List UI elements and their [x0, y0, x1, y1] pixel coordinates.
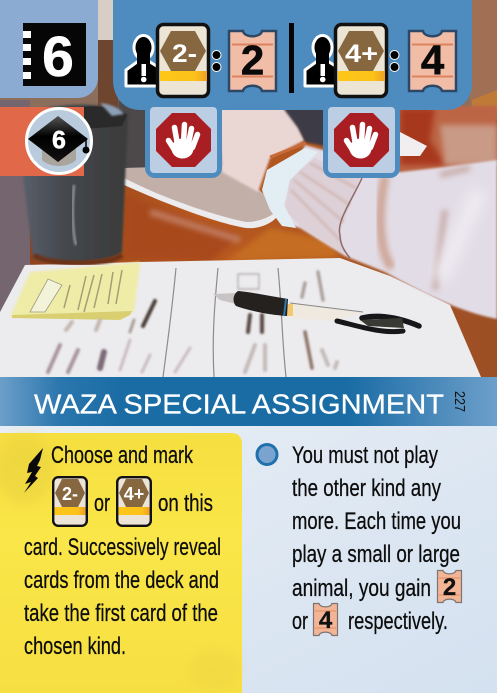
icon: inline card 4+: 4+ [124, 484, 144, 504]
notebook [0, 258, 481, 377]
text: ongoing effect [292, 442, 461, 635]
text: immediate effect: or [94, 490, 110, 517]
pen [213, 291, 419, 332]
photo: desk with notebook, pen, mug and arm [0, 0, 497, 380]
icon: inline card 2-: 2- [62, 484, 78, 504]
text: immediate effect: card. Successively reveal [24, 534, 221, 561]
sleeve [280, 145, 497, 319]
icon: ticket 2: 2 [241, 36, 264, 84]
wood highlights [125, 195, 240, 262]
icon: stop hand 1 [145, 107, 222, 178]
sticky note [10, 262, 140, 317]
panel: stage number [0, 0, 98, 98]
icon: card 4+: 4+ [345, 40, 378, 68]
text: immediate effect [24, 442, 221, 660]
skin [218, 108, 305, 192]
text: ongoing effect: or [292, 608, 308, 635]
icon: ticket 2 [229, 31, 276, 91]
mug [16, 105, 128, 262]
icon: card 2- [158, 24, 208, 96]
icon: person alert [305, 36, 342, 86]
colon [390, 50, 399, 72]
icon: ticket 4: 4 [421, 36, 445, 84]
text: immediate effect: Choose and mark [51, 442, 194, 469]
icon: inline card 2- [53, 477, 87, 526]
divider [289, 23, 294, 93]
panel: ongoing effect [257, 442, 462, 636]
text: immediate effect: cards from the deck and [24, 567, 219, 594]
icon: inline card 4+ [117, 477, 151, 526]
laptop [122, 165, 278, 226]
card number: 227 [451, 391, 468, 412]
title bar [0, 377, 497, 426]
icon: ticket 4 [409, 31, 456, 91]
badge: graduation cap level 6: 6 [52, 126, 66, 154]
left purple floor [0, 100, 32, 312]
text: immediate effect: chosen kind. [24, 633, 126, 660]
text: ongoing effect: animal, you gain [292, 575, 431, 602]
icon: inline ticket 2: 2 [443, 574, 456, 601]
text: ongoing effect: the other kind any [292, 475, 441, 502]
icon: inline ticket 4: 4 [319, 607, 333, 634]
icon: card 4+ [336, 24, 386, 96]
handwriting smudges [48, 272, 337, 372]
cuff [262, 148, 318, 228]
icon: blue circle [257, 444, 277, 464]
panel: yellow immediate effect [0, 433, 242, 693]
colon [212, 50, 221, 72]
text: immediate effect: on this [158, 490, 213, 517]
text: ongoing effect: respectively. [348, 608, 448, 635]
icon: stop hand 2 [323, 107, 400, 178]
panel: orange band [0, 107, 84, 176]
icon: inline ticket 4 [314, 604, 338, 636]
text: immediate effect: take the first card of the [24, 600, 218, 627]
badge: graduation cap level 6 [26, 108, 92, 174]
text: ongoing effect: You must not play [292, 442, 438, 469]
dark area behind mug [118, 100, 230, 180]
panel: lower card background [0, 426, 497, 693]
icon: inline ticket 2 [438, 570, 462, 602]
icon: film strip with number 6: 6 [42, 25, 74, 89]
icon: card 2-: 2- [172, 40, 197, 68]
panel: blue effect header [113, 0, 472, 110]
icon: lightning [24, 448, 43, 493]
icon: person alert [126, 36, 163, 86]
title: WAZA SPECIAL ASSIGNMENT [34, 388, 444, 420]
